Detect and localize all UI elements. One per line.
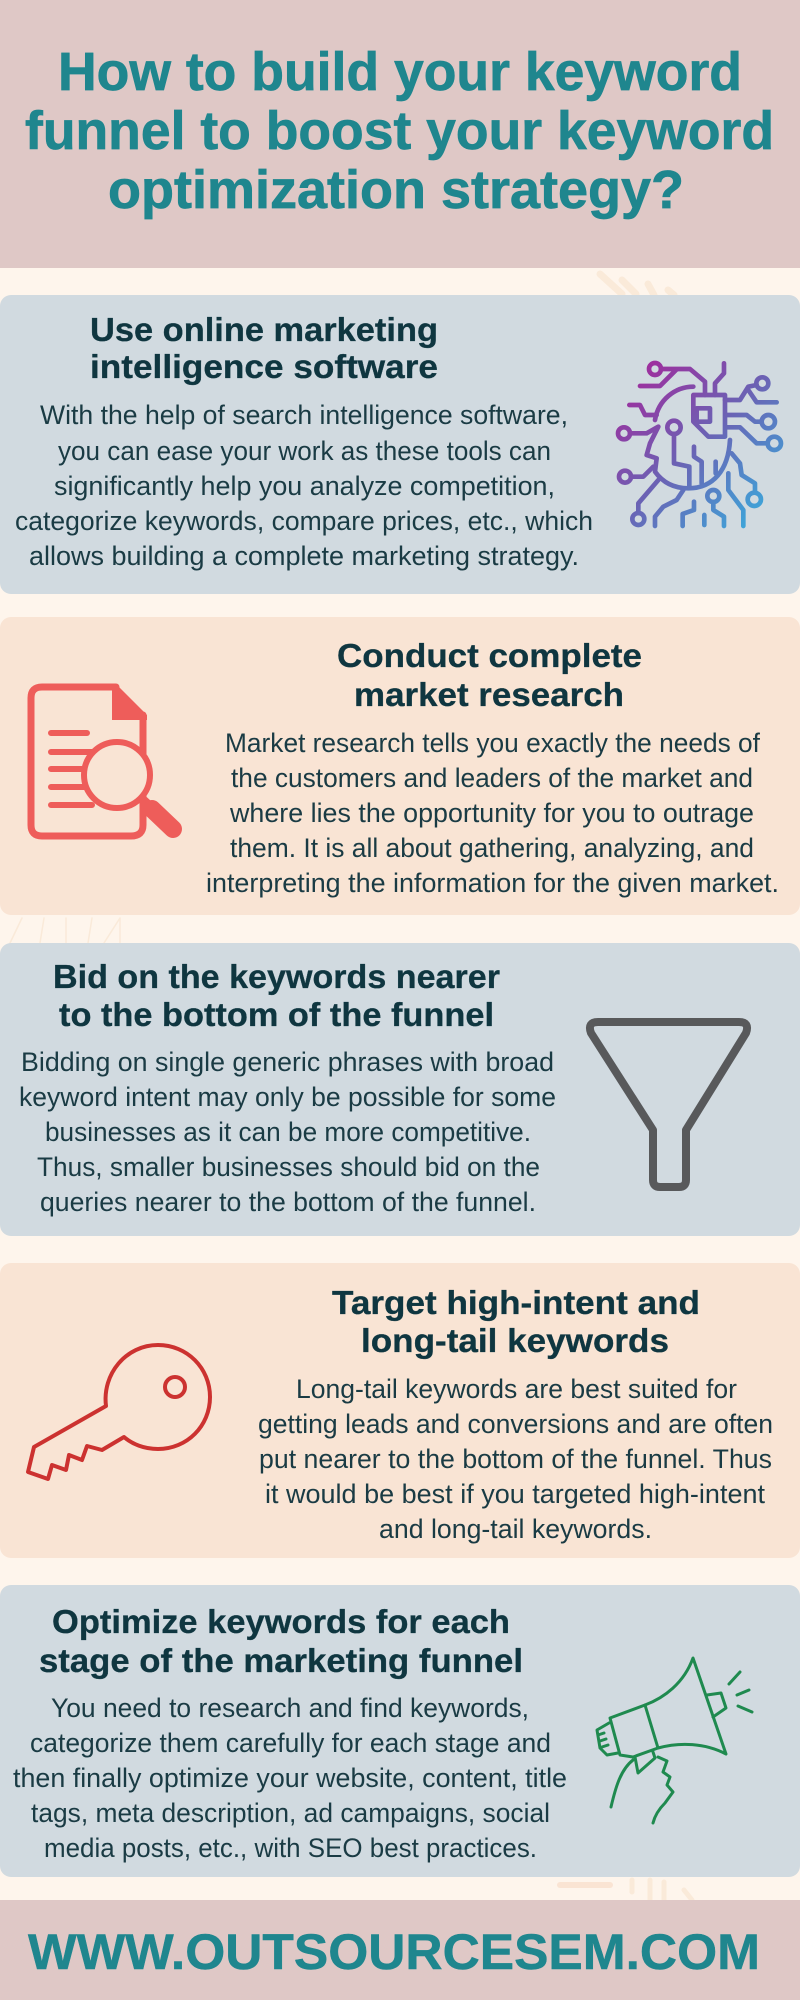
body text: Long-tail keywords are best suited for — [296, 1374, 737, 1404]
body text: interpreting the information for the given market. — [206, 868, 779, 898]
panel: optimize keywords — [0, 1585, 800, 1877]
title — [25, 42, 774, 220]
body text: Bidding on single generic phrases with broad — [21, 1047, 554, 1077]
heading: optimize keywords for each stage — [39, 1603, 523, 1679]
heading: conduct complete market research: Conduct complete — [337, 637, 642, 674]
heading: target high-intent and long-tail keywords: Target high-intent and — [332, 1284, 700, 1321]
icon: document with magnifier — [31, 684, 173, 836]
icon: circuit head — [618, 363, 781, 526]
body text: the customers and leaders of the market and — [231, 763, 753, 793]
icon: megaphone with hand — [597, 1658, 752, 1823]
heading: optimize keywords for each stage: stage of the marketing funnel — [39, 1642, 523, 1679]
body text: where lies the opportunity for you to outrage — [229, 798, 754, 828]
body text: them. It is all about gathering, analyzing, and — [230, 833, 754, 863]
body text: and long-tail keywords. — [379, 1514, 652, 1544]
heading: conduct complete market research: market research — [354, 676, 624, 713]
heading: target high-intent and long-tail keywords: long-tail keywords — [361, 1322, 669, 1359]
heading: use online marketing intelligence software: intelligence software — [90, 348, 438, 385]
body text: getting leads and conversions and are often — [258, 1409, 773, 1439]
body text: You need to research and find keywords, — [51, 1693, 529, 1723]
heading: bid on the keywords nearer: to the bottom of the funnel — [59, 996, 494, 1033]
icon: key — [28, 1345, 210, 1479]
body text: queries nearer to the bottom of the funnel. — [40, 1187, 536, 1217]
body text: allows building a complete marketing strategy. — [29, 541, 579, 571]
body text: Thus, smaller businesses should bid on the — [37, 1152, 540, 1182]
panel: bid on keywords — [0, 943, 800, 1236]
icon: funnel — [590, 1022, 747, 1187]
body text: keyword intent may only be possible for some — [19, 1082, 556, 1112]
body text: With the help of search intelligence software, — [40, 400, 568, 430]
heading: target high-intent and long-tail keywords — [332, 1284, 700, 1359]
body text: categorize keywords, compare prices, etc., which — [15, 506, 593, 536]
body text — [206, 728, 779, 898]
panel: marketing intelligence software — [0, 295, 800, 594]
body text — [19, 1047, 556, 1217]
body text: significantly help you analyze competition, — [54, 471, 555, 501]
body text — [15, 400, 593, 571]
heading: optimize keywords for each stage: Optimize keywords for each — [52, 1603, 510, 1640]
body text — [13, 1693, 567, 1863]
body text: you can ease your work as these tools can — [58, 436, 551, 466]
body text: Market research tells you exactly the needs of — [225, 728, 761, 758]
panel: market research — [0, 617, 800, 915]
heading: use online marketing intelligence software — [90, 311, 438, 385]
body text: it would be best if you targeted high-intent — [265, 1479, 766, 1509]
heading: bid on the keywords nearer — [53, 958, 500, 1033]
body text: put nearer to the bottom of the funnel. Thus — [259, 1444, 772, 1474]
title: optimization strategy? — [108, 160, 684, 220]
website url: WWW.OUTSOURCESEM.COM — [28, 1924, 760, 1980]
heading: conduct complete market research — [337, 637, 642, 713]
body text: media posts, etc., with SEO best practices. — [44, 1833, 537, 1863]
body text — [258, 1374, 773, 1544]
heading: use online marketing intelligence software: Use online marketing — [90, 311, 438, 348]
footer band — [0, 1900, 800, 2000]
panel: high-intent keywords — [0, 1263, 800, 1558]
heading: bid on the keywords nearer: Bid on the keywords nearer — [53, 958, 500, 995]
title: funnel to boost your keyword — [25, 101, 774, 161]
body text: tags, meta description, ad campaigns, social — [31, 1798, 550, 1828]
body text: then finally optimize your website, content, title — [13, 1763, 567, 1793]
body text: businesses as it can be more competitive. — [45, 1117, 531, 1147]
title: How to build your keyword — [58, 42, 742, 102]
header band — [0, 0, 800, 268]
body text: categorize them carefully for each stage and — [30, 1728, 551, 1758]
